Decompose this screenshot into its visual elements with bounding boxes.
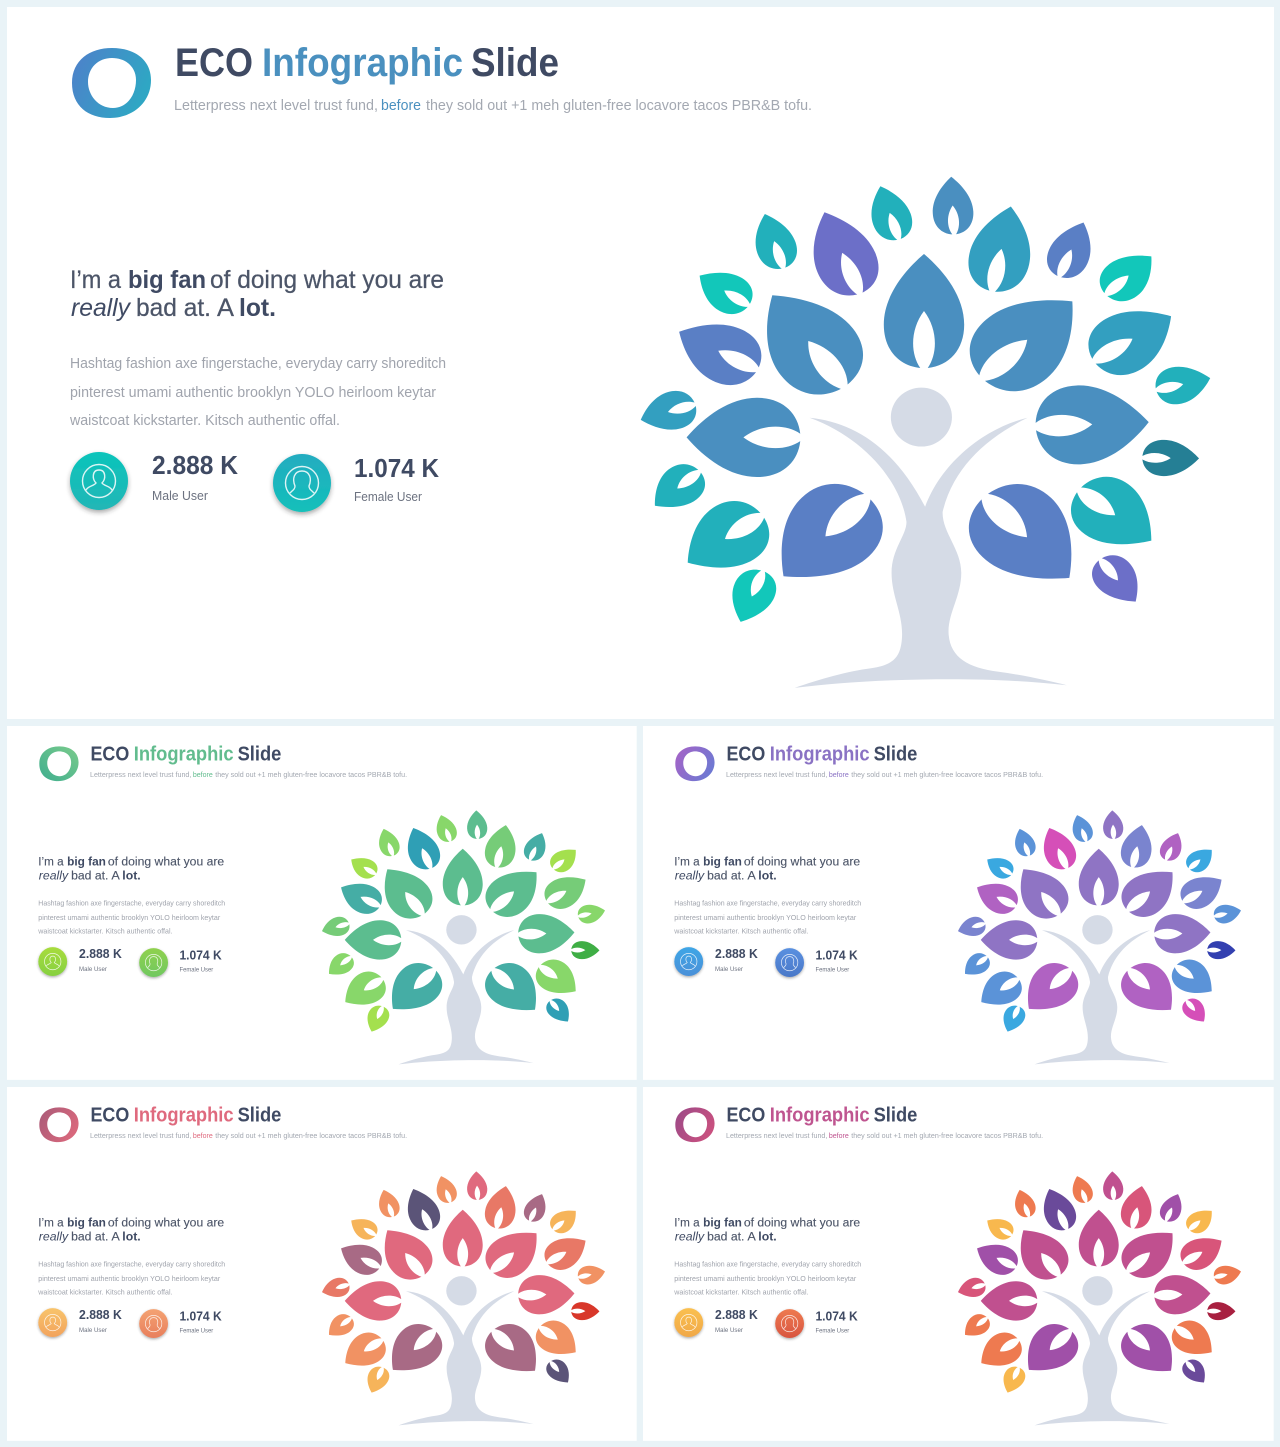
heading: of doing what you are [108,1216,224,1230]
heading: big fan [703,855,742,869]
heading: of doing what you are [210,266,444,294]
heading: lot. [122,1230,141,1244]
subtitle: they sold out +1 meh gluten-free locavore tacos PBR&B tofu. [851,770,1043,779]
heading: big fan [67,855,106,869]
body text [37,1259,225,1297]
title: Slide [238,1104,281,1126]
title: ECO [90,1104,129,1126]
body text [673,898,861,936]
heading: bad at. [71,869,108,883]
body text [673,1259,861,1297]
heading: really [675,869,705,883]
subtitle: they sold out +1 meh gluten-free locavore tacos PBR&B tofu. [215,1131,407,1140]
heading: I’m a [38,1216,64,1230]
stat: male users: Male User [715,1327,744,1334]
subtitle: Letterpress next level trust fund, [90,1131,191,1140]
subtitle: before [829,1131,849,1140]
icon: female user badge [139,948,168,977]
title: Slide [238,743,281,765]
panel: green slide [7,726,637,1080]
heading: big fan [703,1216,742,1230]
heading: A [111,1230,121,1244]
stat: male users: 2.888 K [715,946,758,961]
stat: female users: Female User [815,967,850,974]
heading [38,855,224,883]
icon: ring logo [72,48,151,118]
icon: male user badge [38,947,67,976]
subtitle: Letterpress next level trust fund, [726,1131,827,1140]
subtitle: they sold out +1 meh gluten-free locavore tacos PBR&B tofu. [851,1131,1043,1140]
stat: female users [179,948,222,974]
panel: main blue slide [7,7,1274,719]
heading: bad at. [707,1230,744,1244]
body text: pinterest umami authentic brooklyn YOLO heirloom keytar [674,1274,857,1283]
title: Infographic [770,743,870,765]
stat: female users: 1.074 K [815,948,858,963]
subtitle [90,1131,407,1140]
subtitle: they sold out +1 meh gluten-free locavore tacos PBR&B tofu. [426,97,812,114]
title [726,743,917,765]
stat: female users [815,948,858,974]
title: ECO [90,743,129,765]
icon: female user badge [775,1309,804,1338]
stat: male users: 2.888 K [152,450,238,480]
stat: female users: Female User [179,1328,214,1335]
heading: really [39,1230,69,1244]
icon: male user badge [674,1308,703,1337]
body text [37,898,225,936]
subtitle: Letterpress next level trust fund, [174,97,378,114]
body text: pinterest umami authentic brooklyn YOLO heirloom keytar [38,1274,221,1283]
heading: of doing what you are [108,855,224,869]
title: Slide [874,743,917,765]
stat: male users [79,1307,122,1334]
tree illustration [634,176,1215,688]
heading [674,855,860,883]
title: Infographic [134,1104,234,1126]
heading: A [111,869,121,883]
stat: female users: 1.074 K [815,1309,858,1324]
panel: purple slide [643,726,1274,1080]
body text: waistcoat kickstarter. Kitsch authentic offal. [69,412,340,429]
subtitle: before [829,770,849,779]
subtitle: they sold out +1 meh gluten-free locavore tacos PBR&B tofu. [215,770,407,779]
title [726,1104,917,1126]
stat: female users [354,453,439,504]
heading: A [217,294,234,322]
title: Infographic [262,41,463,85]
body text: pinterest umami authentic brooklyn YOLO heirloom keytar [38,913,221,922]
heading: of doing what you are [744,1216,860,1230]
body text: Hashtag fashion axe fingerstache, everyday carry shoreditch [38,898,225,907]
stat: female users: 1.074 K [354,453,439,483]
icon: green ring logo [39,746,79,781]
heading: bad at. [71,1230,108,1244]
panel: coral slide [7,1087,637,1441]
subtitle: before [381,97,421,114]
stat: female users: 1.074 K [179,1309,222,1324]
heading: big fan [128,266,206,294]
heading: I’m a [38,855,64,869]
icon: male user badge [70,452,128,510]
stat: male users [152,450,238,503]
heading: lot. [758,1230,777,1244]
icon: female user badge [273,454,331,512]
title: Infographic [770,1104,870,1126]
body text: pinterest umami authentic brooklyn YOLO heirloom keytar [70,384,436,401]
subtitle [174,97,812,114]
title [90,743,281,765]
title: ECO [726,1104,765,1126]
body text: Hashtag fashion axe fingerstache, everyday carry shoreditch [674,898,861,907]
body text: Hashtag fashion axe fingerstache, everyday carry shoreditch [70,355,446,372]
title: ECO [726,743,765,765]
subtitle: Letterpress next level trust fund, [90,770,191,779]
stat: male users [715,946,758,973]
stat: female users: 1.074 K [179,948,222,963]
title [175,41,559,85]
subtitle: before [193,770,213,779]
icon: coral ring logo [39,1107,79,1142]
stat: male users: 2.888 K [79,946,122,961]
body text: Hashtag fashion axe fingerstache, everyday carry shoreditch [674,1259,861,1268]
tree head circle [891,388,952,447]
heading: lot. [758,869,777,883]
heading: bad at. [136,294,211,322]
heading: lot. [239,294,276,322]
heading: A [747,1230,757,1244]
subtitle [90,770,407,779]
title: ECO [175,41,253,85]
body text: waistcoat kickstarter. Kitsch authentic offal. [37,927,172,936]
heading: lot. [122,869,141,883]
subtitle: before [193,1131,213,1140]
title [90,1104,281,1126]
heading: big fan [67,1216,106,1230]
heading: really [39,869,69,883]
stat: male users [715,1307,758,1334]
stat: female users: Female User [354,489,423,504]
body text [69,355,446,429]
stat: male users: Male User [715,966,744,973]
heading: of doing what you are [744,855,860,869]
heading [674,1216,860,1244]
heading: really [675,1230,705,1244]
body text: waistcoat kickstarter. Kitsch authentic offal. [37,1288,172,1297]
leaf canopy [634,176,1215,629]
tree trunk figure [795,418,1067,688]
panel: magenta slide [643,1087,1274,1441]
subtitle: Letterpress next level trust fund, [726,770,827,779]
title: Infographic [134,743,234,765]
icon: male user badge [38,1308,67,1337]
stat: female users: Female User [815,1328,850,1335]
heading: I’m a [674,1216,700,1230]
body text: waistcoat kickstarter. Kitsch authentic offal. [673,1288,809,1297]
subtitle [726,770,1043,779]
stat: male users: Male User [152,488,209,503]
tree illustration: purple [955,810,1243,1064]
stat: male users: Male User [79,1327,108,1334]
body text: pinterest umami authentic brooklyn YOLO heirloom keytar [674,913,857,922]
icon: male user badge [674,947,703,976]
icon: female user badge [139,1309,168,1338]
stat: male users: 2.888 K [715,1307,758,1322]
heading: I’m a [70,266,121,294]
tree illustration: green [319,810,607,1064]
title: Slide [874,1104,917,1126]
body text: waistcoat kickstarter. Kitsch authentic offal. [673,927,809,936]
title: Slide [471,41,559,85]
heading [38,1216,224,1244]
tree illustration: coral [319,1171,607,1425]
stat: male users [79,946,122,973]
heading: really [71,294,131,322]
stat: female users [179,1309,222,1335]
icon: purple ring logo [675,746,715,781]
stat: female users [815,1309,858,1335]
body text: Hashtag fashion axe fingerstache, everyday carry shoreditch [38,1259,225,1268]
icon: female user badge [775,948,804,977]
heading: bad at. [707,869,744,883]
heading [70,266,444,322]
stat: male users: Male User [79,966,108,973]
stat: female users: Female User [179,967,214,974]
heading: I’m a [674,855,700,869]
icon: magenta ring logo [675,1107,715,1142]
stat: male users: 2.888 K [79,1307,122,1322]
subtitle [726,1131,1043,1140]
tree illustration: magenta [955,1171,1243,1425]
heading: A [747,869,757,883]
